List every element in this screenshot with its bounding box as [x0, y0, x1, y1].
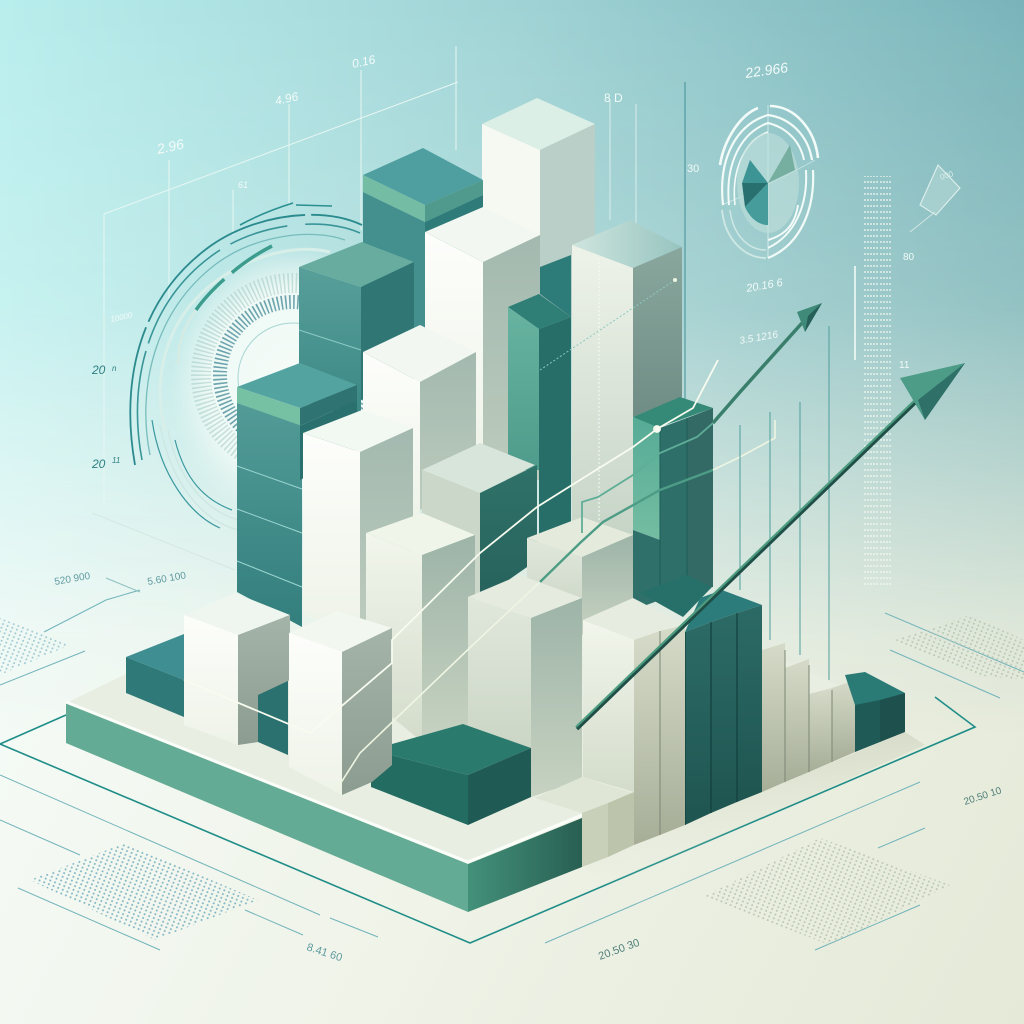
bar: white mid upper: [363, 325, 476, 520]
bars: dark teal stripes: [685, 590, 762, 825]
arrow: small green: [582, 303, 822, 533]
upper right labels and axes: 30: [687, 163, 699, 175]
bars: low front steps: [535, 777, 634, 867]
bars: descending light stripes: [762, 643, 855, 792]
thin value stems: [740, 326, 829, 680]
perspective guide lines with value labels: [92, 46, 458, 570]
upper right labels and axes: 22.966: [743, 59, 789, 81]
axis labels: upper left: 4.96: [274, 89, 300, 108]
upper right labels and axes: [604, 59, 960, 586]
axis labels: upper left: 11: [112, 456, 120, 465]
upper right labels and axes: 11: [899, 360, 910, 371]
arrow: large green: [576, 363, 965, 729]
bar: teal left with band: [237, 363, 357, 627]
dial chart: right ring and pie: [720, 105, 818, 258]
bar: white center low: [366, 513, 475, 742]
bar: light top with dark side: [422, 443, 537, 600]
floor labels: 8.41 60: [305, 941, 344, 964]
floor labels: 20.50 10: [963, 785, 1003, 808]
upper right labels and axes: 20.16 6: [744, 277, 785, 295]
floor labels: [54, 570, 1003, 964]
floor labels: 520 900: [54, 571, 92, 588]
bar: white mid left: [303, 410, 413, 630]
axis labels: upper left: 2.96: [154, 136, 185, 157]
axis labels: upper left: [91, 52, 377, 471]
bar: white center tall: [425, 207, 540, 480]
bar: olive center front: [468, 575, 582, 797]
bar: white olive front cube: [583, 598, 685, 845]
bar: teal with band, back: [363, 148, 483, 340]
bar: flat teal front: [371, 724, 531, 825]
bar: flat teal left: [126, 634, 184, 717]
bar: light right mid: [527, 517, 633, 640]
bar: dark teal column: [508, 255, 571, 540]
radial dial chart behind the bars: [130, 203, 420, 530]
bar: small teal: [258, 677, 288, 755]
cube: white front left: [184, 593, 290, 745]
trend line: white left: [184, 360, 718, 733]
axis labels: upper left: 10000: [110, 310, 134, 324]
axis labels: upper left: 20: [91, 457, 106, 471]
trend line: white right: [335, 420, 775, 792]
bar: dark teal top behind front stack: [640, 575, 712, 617]
platform: [66, 650, 925, 912]
axis labels: upper left: 61: [238, 180, 248, 190]
upper right labels and axes: 3.5 1216: [739, 329, 779, 347]
floor labels: 5.60 100: [147, 570, 187, 588]
bar: tall white right: [572, 220, 682, 560]
upper right labels and axes: 8 D: [604, 91, 623, 105]
axis labels: upper left: n: [112, 364, 117, 373]
floor frame and guide lines: [0, 578, 1024, 950]
upper right labels and axes: 80: [903, 252, 915, 263]
bar: teal cube: [299, 242, 414, 420]
bars: small dark end: [845, 672, 905, 752]
dotted data patches: [0, 615, 1024, 945]
axis labels: upper left: 20: [91, 363, 106, 377]
cube: white front: [289, 611, 392, 795]
floor labels: 20.50 30: [597, 937, 641, 963]
upper right labels and axes: 000: [939, 169, 955, 182]
axis labels: upper left: 0.16: [351, 52, 377, 71]
dotted trend line: [540, 278, 677, 370]
bar: green striped right: [633, 397, 713, 610]
bar: tall white back: [482, 98, 595, 330]
